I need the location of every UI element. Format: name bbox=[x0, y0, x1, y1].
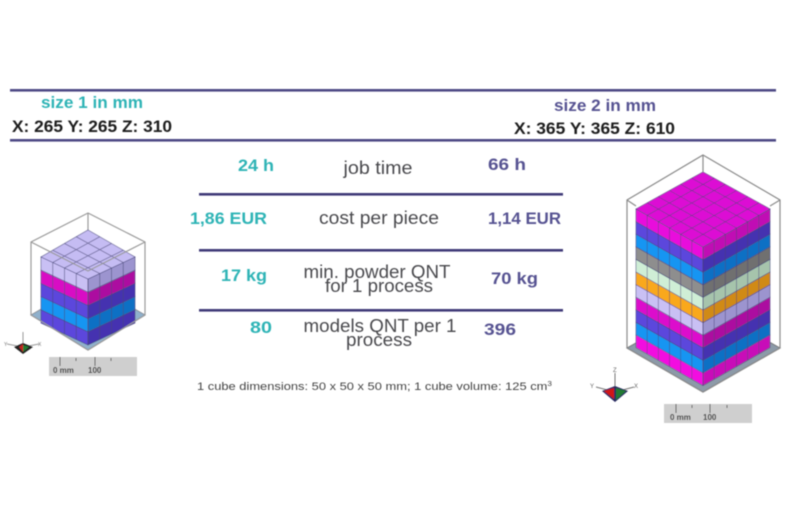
build plate bbox=[31, 282, 145, 350]
heading: size 1 bbox=[12, 93, 172, 136]
row: models quantity: 80 bbox=[250, 318, 272, 337]
axis icon right bbox=[590, 368, 638, 402]
wireframe back bbox=[87, 213, 89, 282]
build plate bbox=[627, 305, 780, 392]
row: models quantity: process bbox=[346, 330, 412, 350]
row: min. powder quantity: 17 kg bbox=[221, 266, 267, 285]
scale bar left: 0 mm bbox=[53, 366, 74, 375]
header rule bottom bbox=[10, 139, 776, 142]
row: job time: 24 h bbox=[238, 156, 274, 175]
scale bar right bbox=[664, 404, 752, 423]
small build volume: 5 layers bbox=[31, 213, 145, 350]
comparison content bbox=[4, 89, 780, 423]
row: models quantity: 396 bbox=[484, 320, 516, 339]
axis icon left: X bbox=[38, 342, 42, 348]
axis icon left bbox=[4, 332, 42, 354]
scale bar right: 0 mm bbox=[670, 413, 691, 422]
heading: size 1: X: 265 Y: 265 Z: 310 bbox=[12, 117, 172, 136]
footnote: 1 cube dimensions: 50 x 50 x 50 mm; 1 cube volume: 125 cm bbox=[197, 381, 496, 393]
row: job time bbox=[238, 155, 526, 178]
row: cost per piece: 1,14 EUR bbox=[488, 209, 561, 228]
scale bar left bbox=[49, 357, 137, 376]
row: job time: job time bbox=[342, 158, 412, 178]
wireframe front bbox=[31, 213, 145, 350]
scale bar left: 100 bbox=[88, 366, 102, 375]
row: cost per piece: 1,86 EUR bbox=[190, 209, 267, 228]
heading: size 2: size 2 in mm bbox=[554, 96, 656, 115]
table rule 2 bbox=[199, 249, 563, 252]
axis icon right: Z bbox=[613, 368, 617, 374]
table rule 3 bbox=[199, 309, 563, 312]
row: min. powder quantity: 70 kg bbox=[491, 269, 538, 288]
scale bar right: 100 bbox=[703, 413, 717, 422]
header rule top bbox=[10, 89, 776, 92]
table rule 1 bbox=[199, 193, 563, 196]
heading: size 2: X: 365 Y: 365 Z: 610 bbox=[514, 119, 675, 138]
heading: size 2 bbox=[514, 96, 675, 138]
row: models quantity: models QNT per 1 bbox=[304, 316, 456, 336]
row: cost per piece: cost per piece bbox=[319, 208, 439, 228]
wireframe bbox=[627, 155, 780, 392]
axis icon left: Y bbox=[4, 342, 8, 348]
row: models quantity bbox=[250, 316, 516, 350]
axis icon right: X bbox=[634, 384, 638, 390]
row: min. powder quantity: for 1 process bbox=[325, 276, 433, 296]
heading: size 1: size 1 in mm bbox=[41, 93, 143, 112]
row: min. powder quantity: min. powder QNT bbox=[304, 262, 450, 282]
row: cost per piece bbox=[190, 208, 561, 228]
axis icon right: Y bbox=[590, 384, 594, 390]
footnote: 3 bbox=[547, 381, 552, 388]
row: job time: 66 h bbox=[488, 155, 526, 174]
row: min. powder quantity bbox=[221, 262, 538, 296]
large build volume: 11 layers bbox=[627, 155, 780, 392]
